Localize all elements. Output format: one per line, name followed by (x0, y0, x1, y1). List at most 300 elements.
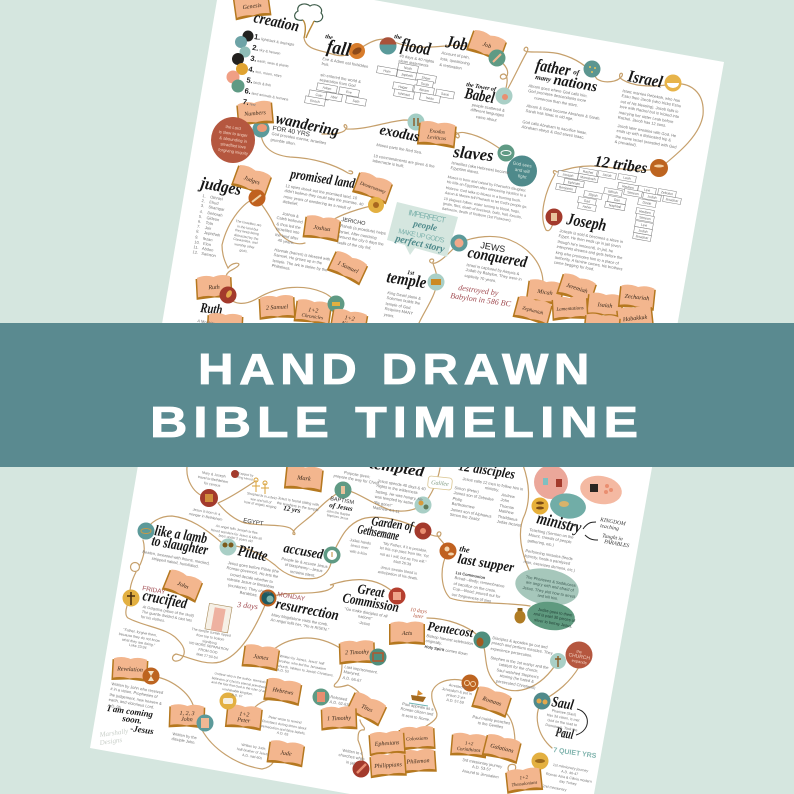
text: list of judges: 12. Samson (192, 249, 216, 258)
text: Great Commission: -Jesus (358, 619, 370, 626)
text: first journey: 1st missionary journey (553, 763, 589, 773)
text: Jesus at twelve (276, 496, 319, 513)
text: list of judges (192, 193, 225, 258)
text: Hannah and Samuel (271, 247, 331, 272)
text: conquered (464, 262, 522, 283)
circle: Joseph (546, 208, 562, 226)
text: Hannah and Samuel: Samuel. He grows up in the (273, 252, 322, 266)
text: Israel: out of his blessing). Jacob falls in (620, 99, 679, 114)
text: first journey: day Turkey (559, 779, 577, 786)
heading: like a lamb to slaughter: like a lamb (153, 523, 209, 547)
heading: 1st temple: temple (385, 267, 428, 292)
icon: money bag (514, 608, 526, 624)
text: Revelation: A.D. 95 (107, 702, 121, 710)
circle: the church: expands (571, 658, 587, 665)
text: disciples right column: Matthew (498, 508, 514, 516)
text: Revelation (107, 681, 164, 717)
text: arrested: prison 2 yrs (446, 693, 466, 700)
text: Ruth: A Moabite woman (197, 318, 229, 328)
book: Jude (267, 739, 305, 767)
book: 2 Samuel: 2 Samuel (266, 304, 289, 312)
text: Father prayer: not as I will, but as You will." (380, 552, 427, 564)
text: Revelation: it in a vision. Prophesies of (110, 686, 158, 700)
heading: Pentecost: Pentecost (427, 618, 475, 640)
prophet books stack: Zechariah (624, 294, 649, 302)
text: Joshua and Caleb (275, 211, 303, 245)
quote: I am coming soon: -Jesus (130, 723, 155, 736)
heading: Great Commission (341, 582, 400, 616)
text: Pentecost: originally. (425, 638, 442, 646)
text: disciples left column: Simon (Peter) (454, 485, 479, 494)
text: disciples left column: Simon the Zealot (449, 512, 480, 522)
circle: Timothy scroll (312, 688, 330, 706)
text: Saul: name (556, 730, 565, 735)
text: Judas: and is paid 30 pieces of (533, 611, 575, 624)
text: Jesus sweats: anticipation of his death. (377, 570, 418, 581)
note: kingdom teaching and parables: PARABLES (603, 539, 630, 549)
text: disciples right column: John (500, 497, 510, 504)
book: 1 & 2 Thessalonians: Thessalonians (511, 780, 538, 787)
tribes family tree boxes: Jacob (602, 172, 612, 178)
text: Israelites distracted: they keep being (235, 228, 259, 236)
note: baptism of Jesus: BAPTISM (330, 496, 355, 506)
text: Moses: gnats, flies, death of livestock, boils, hail, locusts, (443, 202, 522, 219)
text: promised land: disbelief. (282, 199, 299, 207)
genealogy boxes: Adam to Seth: Abel (330, 95, 338, 100)
heading: the flood (394, 34, 433, 59)
note: 10 days later: later (413, 613, 425, 621)
book: 1 & 2 Corinthians: 1+2 (465, 742, 474, 747)
book: 1 & 2 Kings: Kings (340, 321, 357, 329)
text: Stephen: Stephen is the 1st martyr and the (490, 655, 549, 670)
heading: father of many nations: of (573, 68, 580, 77)
heading: tower of Babel: the Tower of (466, 82, 497, 93)
text: first journey (545, 762, 594, 790)
text: teaching: Mount, crowds of people (528, 532, 572, 545)
genealogy boxes: Adam to Seth: Seth (352, 99, 360, 104)
text: last imprisonment (342, 664, 378, 686)
tribes family tree boxes: Naphtali (608, 203, 622, 209)
heading: accused: accused (282, 541, 325, 563)
text: Mary and Joseph: for census (204, 481, 221, 488)
heading: father of many nations: many (535, 73, 553, 84)
text: Herod: King Herod (237, 475, 253, 482)
teal note: God promise: God sees (512, 160, 533, 169)
book: 1, 2, 3 John: 1, 2, 3 (179, 711, 195, 717)
text: Jude: A.D. mid-60s (242, 753, 262, 760)
book: Galatians (482, 732, 522, 764)
note: baptism of Jesus: of Jesus (329, 501, 353, 513)
text: Judas: silver to betray Jesus. (534, 617, 573, 629)
text: Jacob wrestles: Jacob later wrestles with God. He (617, 123, 677, 138)
text: Jericho: walls of the city fell. (337, 239, 372, 250)
text: Peter: A.D. 65 (276, 731, 289, 737)
note: kingdom teaching and parables: KINGDOM (599, 517, 626, 527)
text: list of judges: 9. Ibzan (195, 234, 213, 242)
text: Jacob wrestles (614, 123, 677, 149)
text: last imprisonment: A.D. 66-67 (342, 675, 362, 683)
genealogy boxes: Noah to Abram (377, 63, 454, 103)
text: Great Commission: "Go make disciples of all (344, 606, 388, 619)
text: disciples left column (449, 485, 494, 522)
heading: Jews conquered: JEWS (480, 240, 506, 254)
text: Pentecost: Bishop harvest celebration (426, 633, 473, 646)
text: Israel: Isaac marries Rebekah, who has (622, 88, 680, 103)
book: 1 & 2 Peter: 1+2 (239, 712, 250, 719)
book: Judges: Judges (243, 175, 261, 187)
text: Pharisees: are angry with and afraid of (526, 580, 574, 593)
text: Communion (451, 570, 506, 605)
tribes family tree boxes: Gad (583, 199, 591, 204)
heading: the last supper (456, 544, 516, 576)
text: first journey: A.D. 46-47 (561, 769, 579, 776)
text: list of judges: 1. Othniel (202, 193, 223, 201)
circle: Great Commission (388, 588, 406, 604)
text: released: A.D. 62-63 (329, 699, 349, 708)
text: Job: Account of pain, (441, 50, 470, 60)
heading: Job: Job (444, 31, 469, 55)
text: Judas kiss: with a kiss (349, 549, 367, 556)
book: Ephesians (368, 730, 406, 756)
text: disciples left column: James son of Alphaeus (450, 506, 492, 518)
text: last imprisonment: Martyred. (343, 669, 361, 677)
creation days list: 2. sky & heaven (252, 43, 281, 56)
text: Joseph: authority. A famine comes, his brothers (554, 255, 623, 271)
text: James: A.D. 53 (277, 668, 289, 674)
text: commandments: tabernacle is built. (372, 158, 405, 169)
text: Israelites distracted: worship other (234, 242, 255, 250)
book: 1 & 2 Peter (225, 704, 263, 731)
text: Stephen: stoning (he hated & (499, 673, 534, 684)
text: temple: years. (383, 311, 395, 318)
heading: the last supper: last supper (456, 552, 516, 576)
tribes family tree boxes: Levi (641, 223, 648, 228)
icon: temple curtain (205, 603, 232, 633)
text: tempted: fasting. He was hungry. He (375, 489, 423, 502)
tribes family tree boxes (556, 167, 681, 242)
text: Israel: love with Rachel but is tricked into (619, 104, 680, 119)
text: Abram: Abram goes where God calls him. (528, 83, 588, 98)
text: Gentiles: to the Gentiles (477, 720, 504, 730)
text: sin entered: separation from God (319, 77, 356, 89)
red verse circle (211, 117, 255, 163)
text: Jesus sweats: Jesus sweats blood in (380, 565, 417, 576)
text: list of judges: 4. Deborah (199, 208, 223, 217)
text: third journey: A.D. 53-57 (472, 764, 491, 772)
book: Titus (346, 690, 388, 726)
text: Saul (544, 708, 581, 738)
heading: Ruth: Ruth (199, 301, 223, 318)
text: disciples preach: preach and perform miracles. They (491, 640, 553, 656)
tribes family tree boxes: Issachar (635, 234, 649, 240)
text: Communion: of sacrifice on the cross. (453, 581, 497, 593)
prophet books stack: Habakkuk (622, 315, 648, 323)
text: commandments: 10 commandments are given & the (373, 153, 435, 169)
heading: Garden of Gethsemane: Gethsemane (356, 521, 401, 543)
circle: kings (328, 296, 344, 312)
heading: Saul: Saul (550, 694, 575, 714)
text: list of judges: 7. Jair (197, 224, 212, 231)
text: list of judges: 11. Abdon (193, 244, 214, 253)
prophet books stack: Lamentations (555, 306, 584, 313)
text: Father forgive: "Father, forgive them, (123, 628, 157, 638)
circle: prison glasses (462, 674, 478, 692)
note: destroyed by Babylon: destroyed by (458, 283, 499, 298)
red verse circle: steadfast love (220, 141, 247, 150)
text: disciples right column: Judas Iscariot (496, 519, 522, 528)
text: Herod (237, 471, 254, 482)
text: Father prayer (377, 541, 430, 571)
book: Acts (389, 622, 425, 645)
text: miracles (523, 548, 576, 573)
book: Exodus: Exodus (428, 128, 445, 136)
text: arrested: Arrested in (449, 683, 467, 690)
tribes family tree boxes: Judah (647, 194, 657, 200)
text: list of judges: 3. Shamgar (200, 203, 225, 212)
icon: tree (295, 4, 323, 38)
text: Joseph (553, 228, 624, 272)
callout: imperfect people: IMPERFECT (408, 208, 447, 225)
text: Jericho: JERICHO (341, 217, 366, 227)
heading: 1st temple: 1st (407, 270, 415, 277)
text: tempted: Jesus spends 40 days & 40 (377, 478, 426, 491)
text: Judas (533, 607, 576, 629)
book: Judges (231, 163, 273, 197)
text: Pilate: Jesus goes before Pilate (the (227, 560, 279, 574)
heading: promised land: promised land (289, 167, 357, 192)
heading: creation: creation (252, 9, 301, 35)
text: slaves: Israelites (aka Hebrews) become (451, 160, 510, 175)
teal note: God promise (507, 156, 537, 186)
callout: imperfect people: perfect story (393, 233, 446, 255)
text: fall: fruit. (321, 61, 330, 68)
book: temple lower (206, 313, 244, 338)
circle: hourglass (142, 668, 160, 684)
circle: missionary journey (532, 752, 548, 770)
book: Acts: Acts (401, 631, 413, 637)
text: list of judges: 2. Ehud (201, 198, 219, 206)
circle: Babel (496, 88, 512, 104)
book: 1 Samuel: 1 Samuel (336, 261, 359, 275)
text: Jude (236, 742, 270, 762)
text: tempted: was tempted by satan (374, 494, 414, 506)
heading: Garden of Gethsemane: Garden of (371, 513, 416, 534)
circle: fall (349, 43, 365, 59)
text: list of judges: 6. Tola (198, 219, 213, 226)
book: Ruth (195, 275, 233, 300)
text: Hebrews: believers of Christ's eternal priesthood (212, 676, 267, 689)
text: Babel: different languages (470, 107, 504, 118)
text: Israel (617, 88, 681, 128)
text: Jude: Written by Jude, (241, 743, 267, 751)
text: accused: People lie & accuse Jesus (281, 556, 328, 569)
text: Pilate: crowd decide whether to (230, 571, 273, 584)
text: flee to Egypt (210, 524, 262, 543)
text: temple curtain: signifying (202, 639, 217, 645)
heading: crucified: crucified (141, 587, 189, 613)
creation days list: 5. birds & fish (246, 75, 271, 88)
text: promised land: more years of wandering as a result of (283, 194, 351, 210)
text: Job: loss, questioning (440, 56, 470, 66)
text: John the Baptist: John the Baptist (326, 509, 350, 517)
text: tempted (372, 478, 426, 514)
text: Israel: Rachel. Jacob has 12 sons. (617, 115, 667, 128)
text: released (329, 694, 350, 708)
text: list of judges: 8. Jephthah (196, 229, 221, 238)
circle: Ruth (220, 286, 236, 304)
text: Saul: Has 3d vision, is met (546, 713, 580, 723)
creation days list: 1. light/dark & day/night (253, 32, 295, 47)
tribes family tree boxes: Issachar (665, 197, 679, 203)
tribes family tree boxes: Manasseh (580, 175, 596, 182)
text: crucified (140, 605, 194, 629)
text: Gentiles (471, 714, 511, 731)
text: Jacob wrestles: the name Israel (wrestled with God (615, 134, 677, 149)
heading: tempted: tempted (368, 456, 426, 481)
teal note: God promise: fight (518, 173, 528, 180)
text: Jacob wrestles: ends up with a dislocated hip & (616, 128, 671, 143)
book: Job (466, 28, 508, 62)
tribes family tree boxes: Bilhah (608, 189, 618, 195)
text: Moses: Moses is born and raised by Pharaoh's daughter. (447, 175, 527, 193)
text: Pharisees: The Pharisees & Sadducees (525, 574, 576, 588)
heading: Garden of Gethsemane (356, 513, 416, 543)
text: Father prayer: let this cup pass from Me. Yet (379, 546, 429, 559)
tribes family tree boxes: Dinah (642, 200, 652, 206)
book: 1, 2, 3 John (169, 704, 205, 729)
text: Israelites distracted: gods. (239, 248, 248, 253)
circle: cross (122, 590, 140, 606)
text: Moses: He kills an Egyptian after witnessing injustice to a (446, 180, 526, 198)
banner title line 2: BIBLE TIMELINE (150, 398, 644, 447)
text: Great Commission: nations" (358, 614, 373, 621)
heading: judges: judges (197, 173, 243, 199)
text: disciples right column: Andrew (501, 492, 515, 499)
text: Great Commission (342, 606, 388, 630)
heading: the flood: flood (399, 34, 433, 59)
genealogy boxes: Adam to Seth: Eve (346, 90, 352, 95)
book: Revelation (111, 657, 149, 682)
book: 1 & 2 Corinthians: Corinthians (456, 747, 481, 754)
book: 1 Samuel (327, 249, 369, 285)
text: Hannah and Samuel: Philistines. (271, 263, 291, 271)
text: Pilate: Barabbas. (239, 590, 258, 598)
text: Babel (470, 102, 505, 122)
tribes family tree boxes: Joseph (562, 172, 574, 178)
text: Judas kiss (347, 538, 371, 558)
text: resurrection: An angel tells her, "He is RISEN." (270, 617, 329, 633)
text: third journey (460, 757, 503, 780)
text: Revelation: the judgement, new heaven & (109, 692, 162, 706)
text: Mary and Joseph (197, 471, 229, 488)
heading: like a lamb to slaughter (150, 523, 209, 559)
book: 1 & 2 Peter: Peter (236, 717, 251, 725)
text: Moses: 10 plagues follow: water turning to blood, frogs, (444, 196, 520, 214)
text: teaching (527, 527, 574, 547)
text: Abraham and Sarah: Abram & Sarai become Abraham & Sarah. (526, 103, 601, 121)
circle: flood (380, 37, 396, 54)
book: 1 Timothy: 1 Timothy (327, 716, 351, 722)
tribes family tree boxes: Leah (623, 176, 631, 181)
tribes family tree boxes: Levi (644, 188, 651, 193)
text: Hebrews: Unclear who is the author. Reminds (214, 671, 266, 684)
circle: accused (324, 546, 340, 564)
text: Roman citizen: Paul appeals as a (402, 701, 434, 712)
tribes family tree boxes: Simeon (627, 190, 639, 196)
text: Abraham and Sarah: Sarah has Isaac in old age. (525, 108, 574, 122)
red verse circle: is slow to anger (218, 129, 249, 138)
book: John (162, 568, 204, 603)
note: destroyed by Babylon: Babylon in 586 BC (450, 291, 512, 309)
circle: Saul (534, 692, 550, 710)
circle: Pilate (220, 538, 236, 556)
text: Moses: Aaron & Moses tell Pharaoh to let God's people go. (444, 191, 528, 209)
prophet books stack: Isaiah (596, 302, 613, 310)
book: Titus: Titus (360, 704, 374, 714)
text: Jesus sweats (377, 565, 419, 583)
genealogy boxes: Noah to Abram: Ishmael (398, 91, 410, 97)
text: third journey: 3rd missionary journey (462, 757, 503, 769)
text: disciples preach: Disciples & apostles go out and (492, 635, 548, 650)
heading: the fall: the (325, 34, 334, 41)
circle: Job (488, 50, 506, 66)
book: Exodus: Leviticus (426, 134, 446, 142)
text: Jericho: Rahab (a prostitute) helps (340, 223, 386, 236)
tribes family tree boxes: Reuben (622, 184, 634, 190)
text: temple curtain: Matt 27:50-54 (196, 652, 218, 660)
prophet books stack: Jeremiah (565, 283, 588, 295)
circle: chains (370, 648, 386, 666)
text: temple curtain (187, 627, 231, 662)
book: Exodus (417, 120, 457, 149)
book: James (242, 643, 280, 671)
text: flood: 40 days & 40 nights (399, 53, 435, 64)
text: Stephen: catalyst for the church. (498, 662, 539, 674)
text: Father prayer: Matt 26:39 (393, 560, 411, 567)
text: Judas kiss: Judas hands (349, 538, 371, 546)
text: Jesus at twelve: the teachers in the temple (276, 501, 319, 513)
text: Communion: our forgiveness of sins (451, 591, 492, 603)
book: Hebrews: Hebrews (271, 687, 294, 697)
text: James (277, 654, 336, 683)
text: Saul: Damascus. Took the (545, 723, 578, 732)
tag: Galilee (427, 476, 453, 490)
text: Father forgive: because they do not know (118, 632, 160, 643)
tribes family tree boxes: Judah (638, 228, 648, 234)
heading: like a lamb to slaughter: to slaughter (150, 533, 209, 559)
text: teaching: gathering, etc.) (527, 538, 554, 547)
heading: crucified: FRIDAY (142, 585, 167, 596)
text: Father forgive: what they are doing." (122, 637, 155, 647)
book: 1 & 2 Kings: 1+2 (344, 315, 355, 323)
text: Moses (442, 175, 528, 223)
text: temple: temple of God. (385, 301, 412, 310)
text: first journey: Roman Asia & Cilicia modern (546, 772, 592, 784)
text: conquered: captivity 70 years. (464, 273, 497, 283)
heading: Israel: Israel (625, 66, 664, 92)
text: Jesus is born: Jesus is born in a (192, 508, 221, 516)
note: baptism of Jesus (329, 496, 355, 513)
text: Israelites distracted (233, 219, 262, 253)
circle: resurrection (260, 590, 276, 606)
text: flood: clean statements (398, 58, 429, 69)
text: Stephen: persecuted Christians) (496, 678, 536, 690)
heading: slaves: slaves (452, 142, 495, 165)
text: Job (439, 50, 470, 71)
text: crucified: At Golgotha (place of the skull) (142, 605, 194, 618)
text: disciples left column: Bartholomew (451, 501, 475, 510)
circle: last supper (440, 542, 456, 560)
